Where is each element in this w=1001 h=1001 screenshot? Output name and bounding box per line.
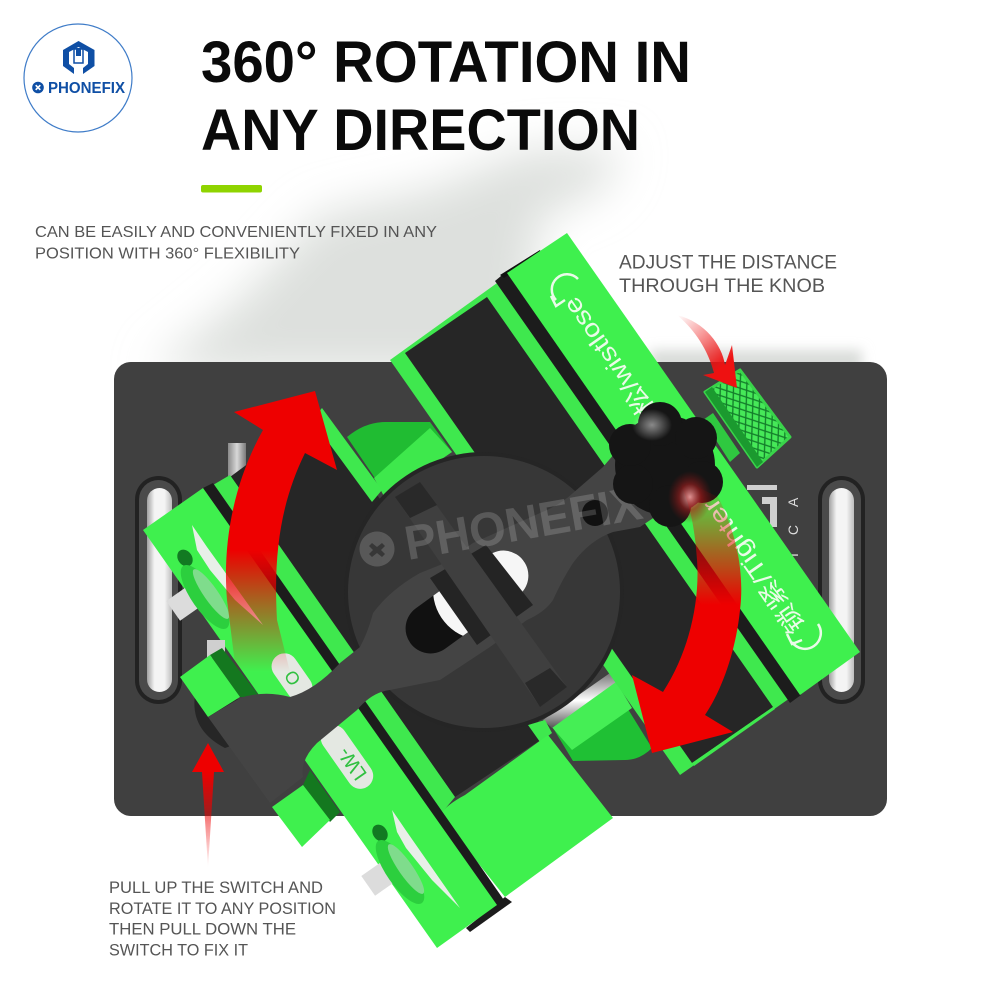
- main frame upper: [390, 278, 790, 775]
- watermark: [360, 477, 646, 571]
- base plate: [114, 362, 887, 816]
- text: knob callout: ADJUST THE DISTANCE: [619, 252, 837, 274]
- top green clamp bar: [495, 233, 860, 703]
- pill model label: LW-: [334, 743, 372, 784]
- star knob: [609, 402, 723, 527]
- suction clamp lower: [361, 810, 460, 911]
- text: switch callout: PULL UP THE SWITCH AND: [109, 879, 323, 897]
- left frame section: [213, 408, 552, 815]
- pill model label: [316, 720, 378, 794]
- left green clamp bar: [143, 483, 506, 948]
- title: ANY DIRECTION: [201, 98, 640, 163]
- white bearing: [433, 550, 528, 636]
- green strip upper left: [312, 408, 382, 502]
- text: intro description: [35, 224, 437, 262]
- title accent bar: [201, 185, 262, 192]
- arrow: left rotation: [226, 391, 337, 672]
- center disc: [344, 452, 624, 732]
- icon: rotate arrow top: [551, 274, 578, 306]
- green small strip: [528, 720, 552, 742]
- suction clamp upper: [166, 525, 263, 636]
- green handle upper: [180, 640, 260, 717]
- central slot: [406, 550, 528, 654]
- lever arm: [208, 453, 665, 803]
- pill upper: O: [280, 666, 305, 689]
- bottom green block: [440, 735, 613, 932]
- text: switch callout: SWITCH TO FIX IT: [109, 942, 248, 960]
- black pad upper: [405, 297, 773, 763]
- logo wordmark: PHONEFIX: [48, 80, 126, 97]
- left slot: [135, 476, 182, 704]
- title: 360° ROTATION IN: [201, 30, 691, 95]
- arrow: switch pointer: [192, 743, 224, 868]
- plate brand mark: [747, 480, 801, 557]
- text: switch callout: ROTATE IT TO ANY POSITION: [109, 900, 336, 918]
- green wedge upper: [347, 422, 452, 498]
- text: knob callout: [619, 252, 837, 297]
- text: switch callout: [109, 879, 336, 960]
- knurled adjustment knob: [703, 370, 790, 467]
- central slider: [395, 482, 567, 707]
- black pad left: [230, 412, 548, 797]
- background haze: [150, 150, 862, 372]
- bearing dark band: [430, 545, 533, 645]
- watermark text: PHONEFIX: [401, 477, 646, 571]
- bar text tighten: 锁紧/Tighter: [697, 493, 811, 639]
- watermark icon: [360, 532, 395, 566]
- icon: wrench phone: [63, 41, 94, 74]
- icon: logo x mark: [32, 82, 44, 93]
- text: intro description: POSITION WITH 360° FLEXIBILITY: [35, 246, 300, 262]
- text: knob callout: THROUGH THE KNOB: [619, 276, 825, 297]
- icon: rotate arrow bottom: [787, 624, 821, 649]
- logo badge: [24, 24, 132, 132]
- steel pin: [228, 443, 246, 479]
- green wedge lower: [543, 673, 652, 761]
- green handle lower: [272, 770, 340, 847]
- right slot: [818, 476, 865, 704]
- arrow: knob pointer: [677, 315, 737, 388]
- text: switch callout: THEN PULL DOWN THE: [109, 920, 296, 938]
- dark handle shadow: [194, 695, 262, 748]
- plate brand mark: ICA: [785, 480, 801, 557]
- green strip long: [213, 475, 455, 815]
- lever hole: [582, 500, 608, 526]
- arrow: right rotation: [632, 477, 741, 753]
- bar text loosen: 松/wistlose: [558, 292, 660, 421]
- pill upper: [266, 648, 318, 706]
- title: [201, 30, 691, 163]
- text: intro description: CAN BE EASILY AND CONVENIENTLY FIXED IN ANY: [35, 224, 437, 241]
